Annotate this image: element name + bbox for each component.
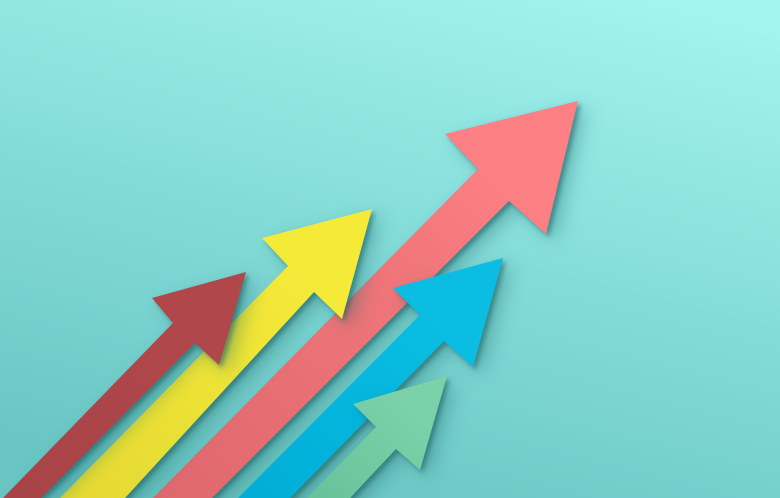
green arrow (307, 376, 447, 498)
blue arrow (238, 258, 503, 498)
red arrow (3, 272, 246, 498)
pink arrow (153, 101, 578, 498)
yellow arrow (60, 209, 372, 498)
